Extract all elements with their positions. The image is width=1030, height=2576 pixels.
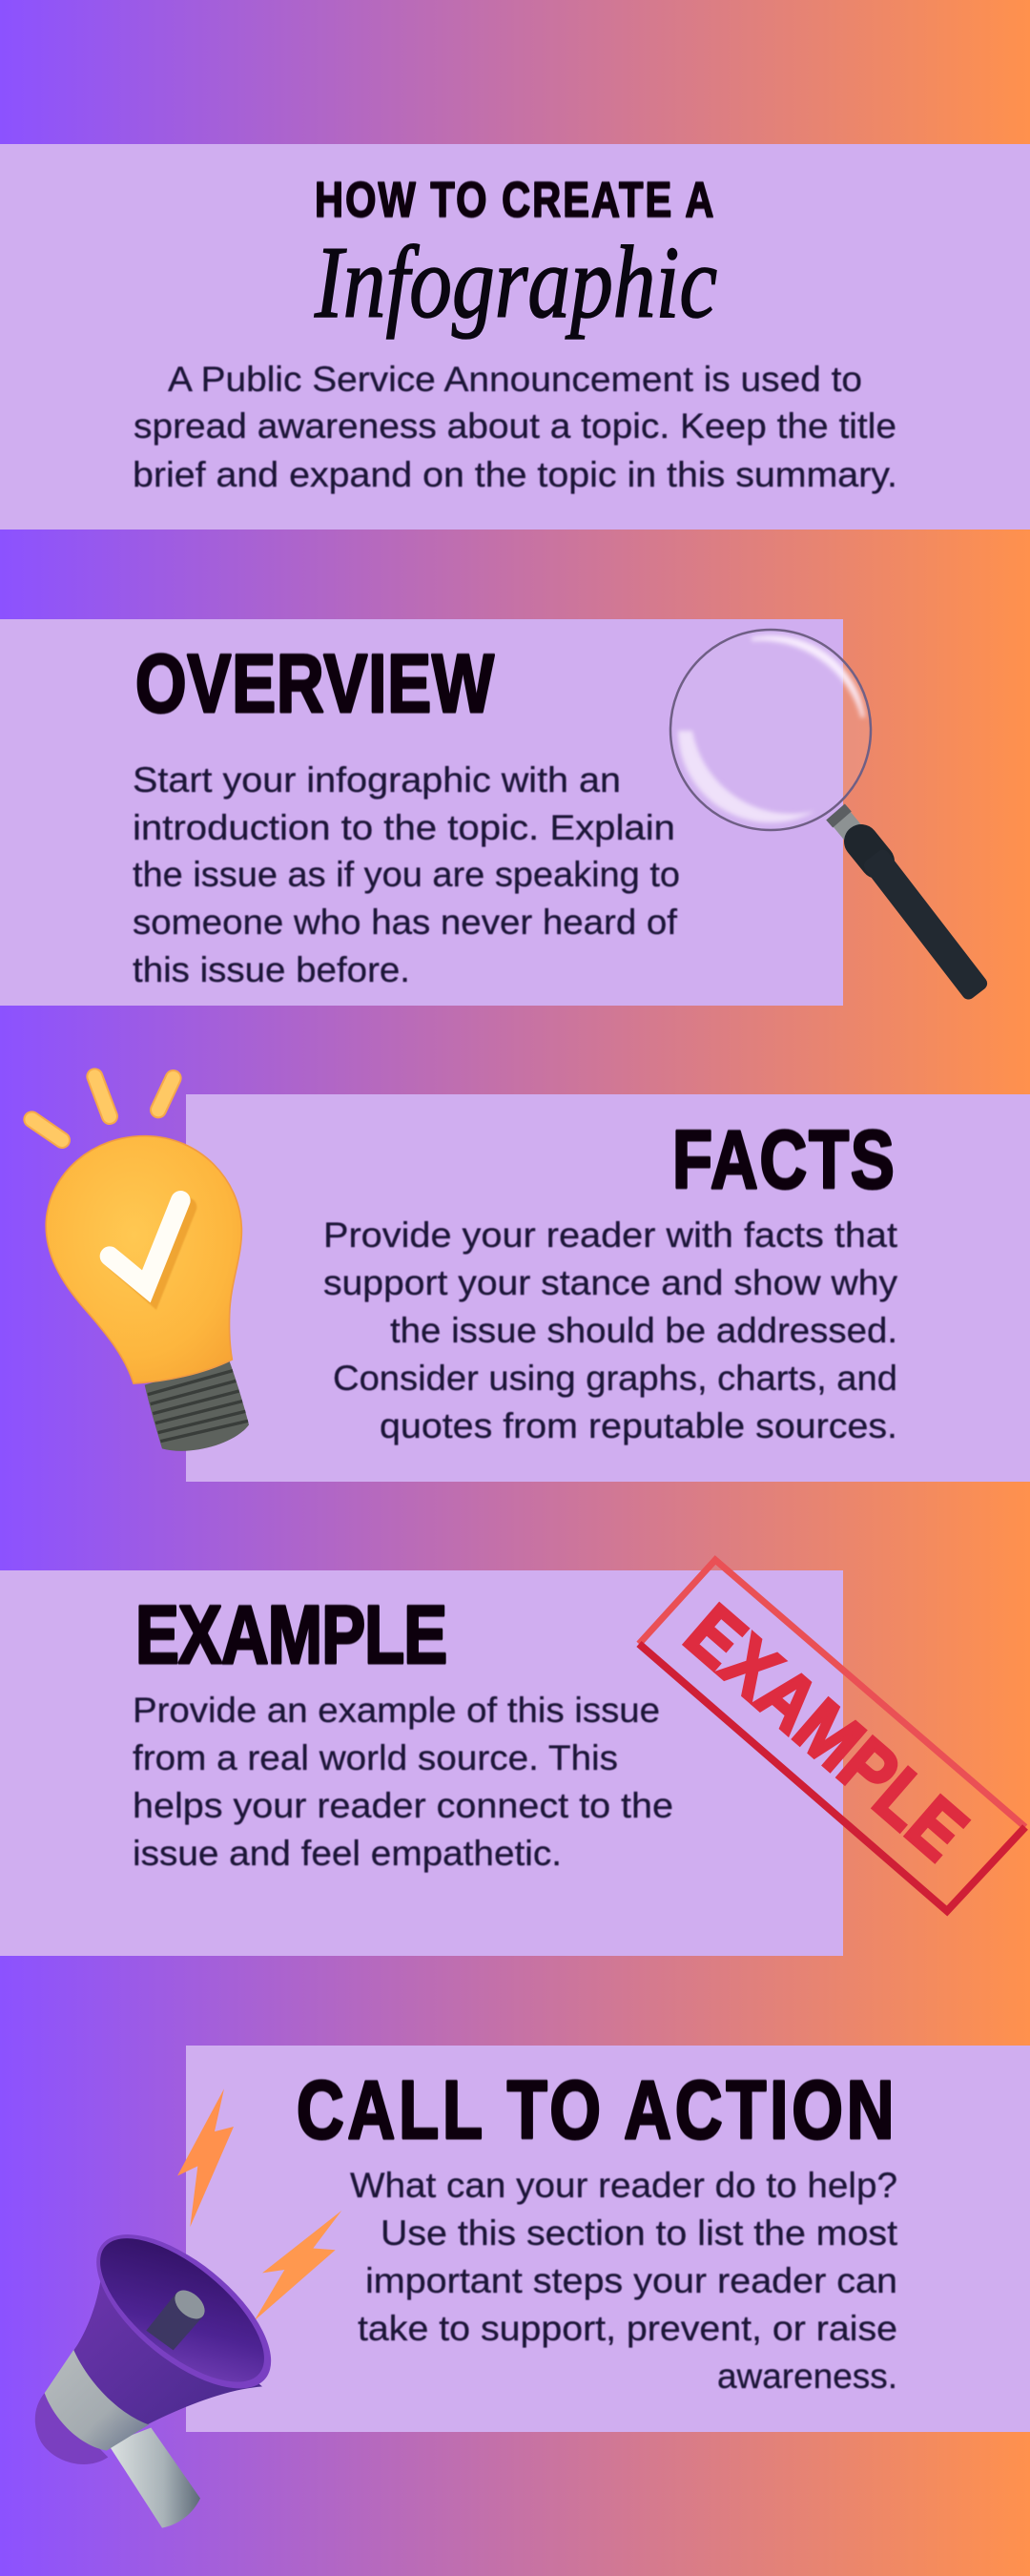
example text: helps your reader connect to the (133, 1786, 673, 1825)
facts text (323, 1215, 898, 1445)
facts text: the issue should be addressed. (390, 1311, 897, 1350)
example text (133, 1691, 673, 1873)
heading: facts: FACTS (672, 1114, 895, 1206)
call to action text: What can your reader do to help? (350, 2166, 897, 2205)
heading: example: EXAMPLE (135, 1589, 447, 1681)
summary text: A Public Service Announcement is used to (168, 360, 862, 399)
icon: light bulb with check (31, 1076, 249, 1451)
call to action text: Use this section to list the most (381, 2213, 898, 2253)
facts text: quotes from reputable sources. (380, 1406, 897, 1445)
overview text (133, 760, 680, 989)
overview text: the issue as if you are speaking to (133, 855, 680, 894)
facts text: Provide your reader with facts that (323, 1215, 898, 1255)
heading: call to action: CALL TO ACTION (297, 2065, 894, 2156)
panel: example (0, 1560, 1025, 1956)
panel: call to action (35, 2046, 1030, 2528)
example text: issue and feel empathetic. (133, 1834, 562, 1873)
heading: overview: OVERVIEW (135, 638, 494, 730)
call to action text (350, 2166, 898, 2396)
icon: lightning bolt upper (177, 2088, 234, 2227)
icon: example stamp: EXAMPLE (670, 1589, 982, 1877)
panel: title (0, 144, 1030, 530)
facts text: Consider using graphs, charts, and (333, 1359, 897, 1398)
overview text: introduction to the topic. Explain (133, 808, 675, 847)
example text: Provide an example of this issue (133, 1691, 660, 1730)
overview text: Start your infographic with an (133, 760, 621, 800)
panel: overview (0, 619, 990, 1006)
panel: facts (31, 1076, 1030, 1482)
call to action text: take to support, prevent, or raise (358, 2309, 897, 2348)
overview text: someone who has never heard of (133, 903, 678, 942)
icon: lightning bolt lower (255, 2211, 341, 2320)
heading: how to create a: HOW TO CREATE A (315, 172, 713, 227)
facts text: support your stance and show why (323, 1263, 898, 1302)
icon: magnifying glass (670, 630, 990, 1002)
summary text: spread awareness about a topic. Keep the title (134, 406, 896, 446)
call to action text: awareness. (717, 2357, 897, 2396)
summary text (133, 360, 897, 494)
call to action text: important steps your reader can (365, 2261, 897, 2300)
summary text: brief and expand on the topic in this summary. (133, 455, 897, 494)
overview text: this issue before. (133, 950, 410, 989)
heading: infographic script: Infographic (314, 226, 717, 340)
icon: megaphone with lightning bolts (35, 2088, 341, 2528)
example text: from a real world source. This (133, 1738, 618, 1777)
